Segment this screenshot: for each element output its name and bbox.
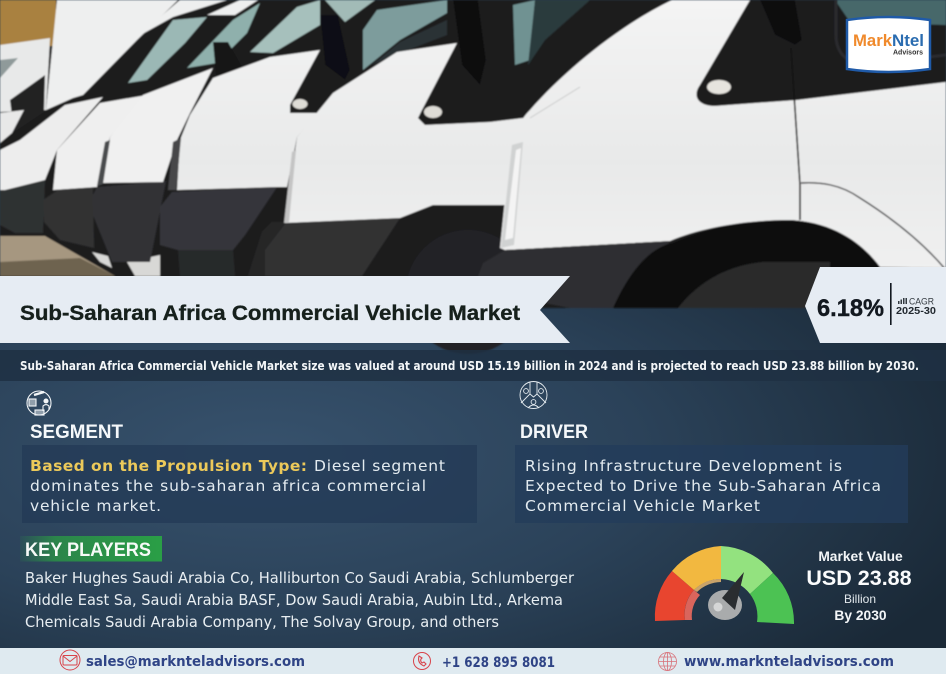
icon: segment globe: [27, 391, 51, 415]
driver description box: Rising Infrastructure Development is: [525, 457, 842, 475]
logo: MarkNtel Advisors: Advisors: [893, 48, 923, 56]
icon: globe: [658, 652, 676, 670]
segment description box: Based on the Propulsion Type:: [30, 457, 307, 475]
key players list: [25, 569, 575, 631]
segment description box: [22, 445, 477, 523]
phone number: +1 628 895 8081: [442, 655, 555, 671]
heading: driver: DRIVER: [520, 421, 588, 443]
page background: [0, 276, 946, 674]
key players heading: KEY PLAYERS: [25, 539, 151, 561]
icon: phone: [414, 652, 430, 670]
title: Sub-Saharan Africa Commercial Vehicle Market: [20, 302, 520, 325]
key players list: Baker Hughes Saudi Arabia Co, Halliburton Co Saudi Arabia, Schlumberger: [25, 569, 575, 587]
market value: USD 23.88: [806, 566, 912, 590]
gauge chart: [655, 546, 794, 624]
title banner: [0, 276, 570, 343]
summary strip: [0, 350, 946, 381]
CAGR label: CAGR: [909, 296, 934, 308]
footer contact bar: [0, 648, 946, 674]
icon: email: [60, 650, 80, 670]
gauge hub: [708, 590, 742, 620]
CAGR panel: [805, 267, 946, 343]
photo: row of white commercial vans: [0, 0, 946, 354]
gauge needle: [722, 572, 744, 610]
icon: driver people circle: [520, 382, 547, 408]
CAGR period: 2025-30: [896, 306, 936, 317]
market value: [806, 549, 912, 623]
logo: MarkNtel Advisors: Ntel: [892, 32, 924, 50]
panel: segment: [22, 391, 477, 523]
segment description box: dominates the sub-saharan africa commercial: [30, 477, 426, 495]
driver description box: Expected to Drive the Sub-Saharan Africa: [525, 477, 881, 495]
panel: key players: [20, 536, 575, 631]
icon: bar chart: [898, 298, 907, 304]
driver description box: Commercial Vehicle Market: [525, 497, 760, 515]
market value: By 2030: [834, 608, 887, 623]
logo: MarkNtel Advisors: [847, 17, 930, 72]
key players list: Middle East Sa, Saudi Arabia BASF, Dow Saudi Arabia, Aubin Ltd., Arkema: [25, 591, 563, 609]
website: www.marknteladvisors.com: [684, 654, 894, 670]
market value: Billion: [844, 592, 876, 606]
segment description box: vehicle market.: [30, 497, 161, 515]
panel: driver: [515, 382, 908, 523]
driver description box: [515, 445, 908, 523]
market value: Market Value: [818, 549, 903, 564]
key players list: Chemicals Saudi Arabia Company, The Solvay Group, and others: [25, 613, 499, 631]
segment description box: Diesel segment: [314, 457, 445, 475]
heading: segment: SEGMENT: [30, 421, 123, 443]
CAGR value: 6.18%: [817, 295, 884, 322]
email address: sales@marknteladvisors.com: [86, 654, 305, 670]
logo: MarkNtel Advisors: Mark: [853, 32, 893, 50]
